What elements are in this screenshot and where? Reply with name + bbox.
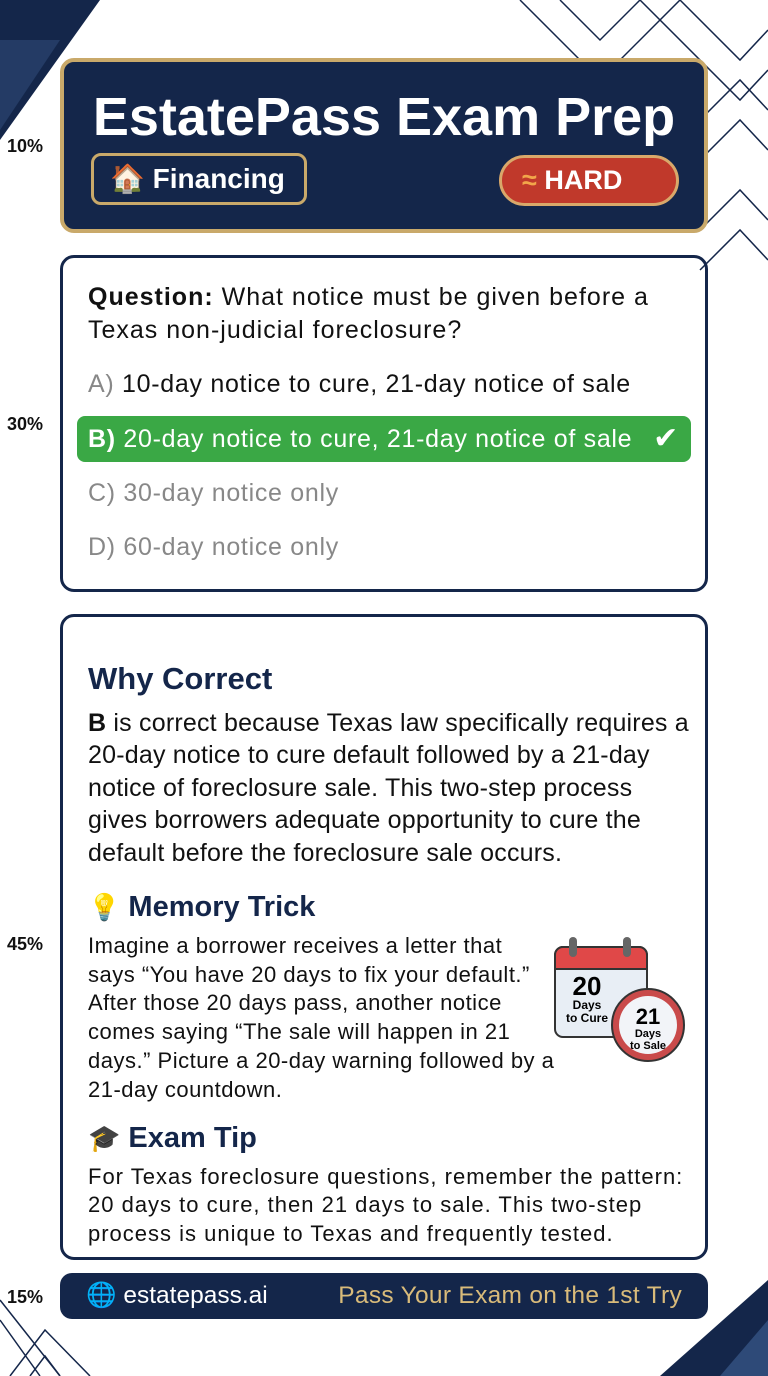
category pill: 🏠 Financing [110,163,285,194]
icon: calendar and clock: 21 [636,1004,660,1029]
memory trick body: 21-day countdown. [88,1077,282,1102]
icon: calendar and clock: Days [635,1028,661,1040]
icon: calendar and clock: Days [573,998,602,1012]
explanation card [60,614,708,1260]
why correct body: 20-day notice to cure default followed by a 21-day [88,741,650,769]
why correct body [88,709,689,867]
percent label 45: 45% [7,934,43,954]
memory trick body: says “You have 20 days to fix your default.” [88,962,530,987]
memory trick body: After those 20 days pass, another notice [88,990,502,1015]
difficulty pill [499,155,679,206]
memory trick body: Imagine a borrower receives a letter that [88,933,502,958]
icon: calendar and clock: to Cure [566,1011,608,1025]
header panel [60,58,708,233]
option D: D) 60-day notice only [88,533,339,561]
exam tip body: 20 days to cure, then 21 days to sale. This two-step [88,1192,642,1217]
memory trick heading: 💡 Memory Trick [88,891,315,923]
footer url: 🌐 estatepass.ai [86,1282,268,1309]
icon: calendar and clock: 20 [573,971,601,1001]
exam tip body: For Texas foreclosure questions, remember the pattern: [88,1164,683,1189]
title: EstatePass Exam Prep [93,87,675,147]
question text [88,283,649,344]
percent label 15: 15% [7,1287,43,1307]
icon: calendar and clock: to Sale [630,1040,666,1052]
why correct heading: Why Correct [88,661,272,696]
why correct body: default before the foreclosure sale occurs. [88,839,562,867]
category pill [91,153,307,205]
question text: Question: What notice must be given before a [88,283,649,311]
option B correct: ✔ [653,422,679,455]
option B correct: B) 20-day notice to cure, 21-day notice of sale [88,425,632,453]
memory trick body [88,933,554,1102]
footer tagline: Pass Your Exam on the 1st Try [338,1282,682,1309]
exam tip heading: 🎓 Exam Tip [88,1122,257,1154]
question text: Texas non-judicial foreclosure? [88,316,462,344]
memory trick body: days.” Picture a 20-day warning followed by a [88,1048,554,1073]
option A: A) 10-day notice to cure, 21-day notice of sale [88,370,631,398]
why correct body: gives borrowers adequate opportunity to cure the [88,806,641,834]
icon: calendar and clock [554,937,685,1062]
memory trick body: comes saying “The sale will happen in 21 [88,1019,510,1044]
why correct body: notice of foreclosure sale. This two-step process [88,774,632,802]
difficulty pill: ≈ HARD [522,165,622,195]
exam tip body [88,1164,683,1246]
question card [60,255,708,592]
why correct body: B is correct because Texas law specifically requires a [88,709,689,737]
exam tip body: process is unique to Texas and frequently tested. [88,1221,614,1246]
percent labels: 10% [7,136,43,156]
option C: C) 30-day notice only [88,479,339,507]
percent label 30: 30% [7,414,43,434]
option B correct [77,416,691,462]
footer bar [60,1273,708,1319]
